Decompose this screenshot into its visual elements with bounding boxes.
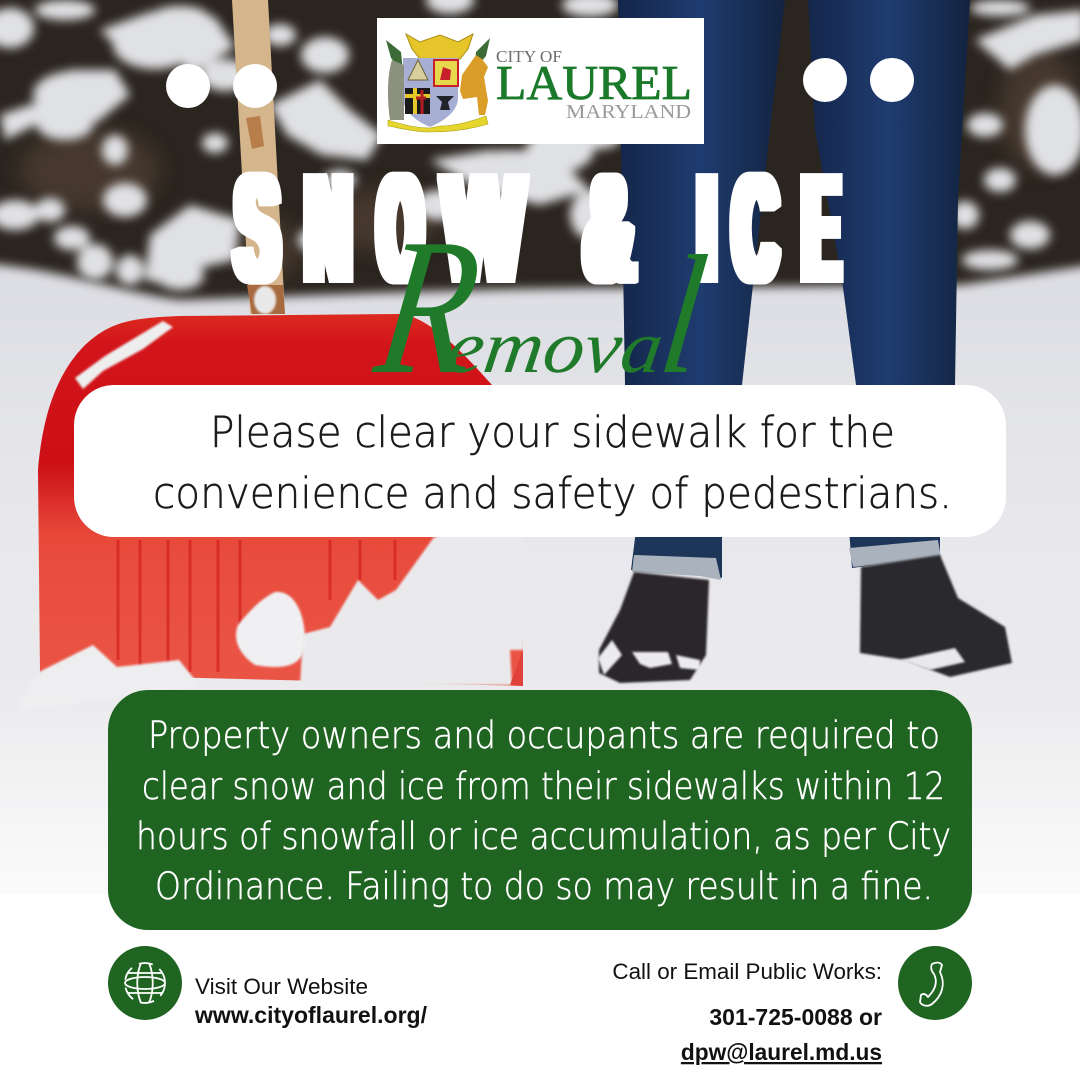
green pill: ordinance notice: hours of snowfall or ice accumulation, as per City — [136, 815, 951, 858]
title: SNOW & ICE: W — [444, 143, 524, 313]
contact text: Call or Email Public Works: — [612, 959, 882, 984]
green pill: ordinance notice — [108, 690, 972, 930]
red shovel — [20, 314, 524, 710]
icon: globe — [108, 946, 182, 1020]
right boot — [860, 555, 1012, 677]
title: SNOW & ICE: N — [306, 143, 351, 313]
title: SNOW & ICE: S — [236, 143, 278, 313]
right trouser cuff — [849, 530, 940, 568]
right trouser leg — [808, 0, 970, 385]
shovel handle — [232, 0, 285, 314]
green pill: ordinance notice: clear snow and ice from their sidewalks within 12 — [142, 765, 945, 808]
snow mound over the shovel — [300, 537, 524, 685]
logo: City of Laurel Maryland — [377, 18, 704, 144]
script subtitle: Removal — [365, 200, 719, 415]
decorative white dots, right — [803, 58, 914, 102]
title: SNOW & ICE: O — [379, 143, 422, 313]
script subtitle: Removal: emova — [442, 305, 669, 388]
logo wordmark: LAUREL — [496, 55, 692, 110]
script subtitle: Removal: l — [652, 222, 716, 409]
fade to white — [0, 690, 1080, 895]
website text: Visit Our Website — [195, 974, 368, 999]
website text: www.cityoflaurel.org/ — [194, 1002, 428, 1028]
left trouser cuff — [631, 530, 722, 578]
logo wordmark: MARYLAND — [566, 101, 691, 123]
title: SNOW & ICE: & — [585, 143, 634, 313]
white pill: request: Please clear your sidewalk for the — [210, 408, 895, 458]
website text — [194, 974, 428, 1028]
white pill: request: convenience and safety of pedestrians. — [153, 469, 952, 519]
contact text — [612, 959, 882, 1065]
script subtitle: Removal: R — [365, 200, 492, 415]
title: SNOW & ICE — [236, 143, 839, 313]
green pill: ordinance notice: Ordinance. Failing to do so may result in a fine. — [155, 865, 933, 908]
title: SNOW & ICE: I — [698, 143, 715, 313]
contact text: 301-725-0088 or — [709, 1004, 882, 1030]
crest icon — [386, 34, 490, 132]
left boot — [599, 572, 709, 683]
hedge behind the snow — [0, 0, 1080, 320]
title: SNOW & ICE: C — [734, 143, 777, 313]
green pill: ordinance notice: Property owners and occupants are required to — [148, 714, 940, 757]
contact text: dpw@laurel.md.us — [681, 1039, 882, 1065]
bottom white band — [0, 895, 1080, 1080]
left trouser leg — [618, 0, 785, 385]
title: SNOW & ICE: E — [803, 143, 839, 313]
decorative white dots, left — [166, 64, 277, 108]
white pill: request — [74, 385, 1006, 537]
icon: phone — [898, 946, 972, 1020]
logo wordmark: CITY OF — [496, 47, 562, 66]
snowfield — [0, 262, 1080, 930]
